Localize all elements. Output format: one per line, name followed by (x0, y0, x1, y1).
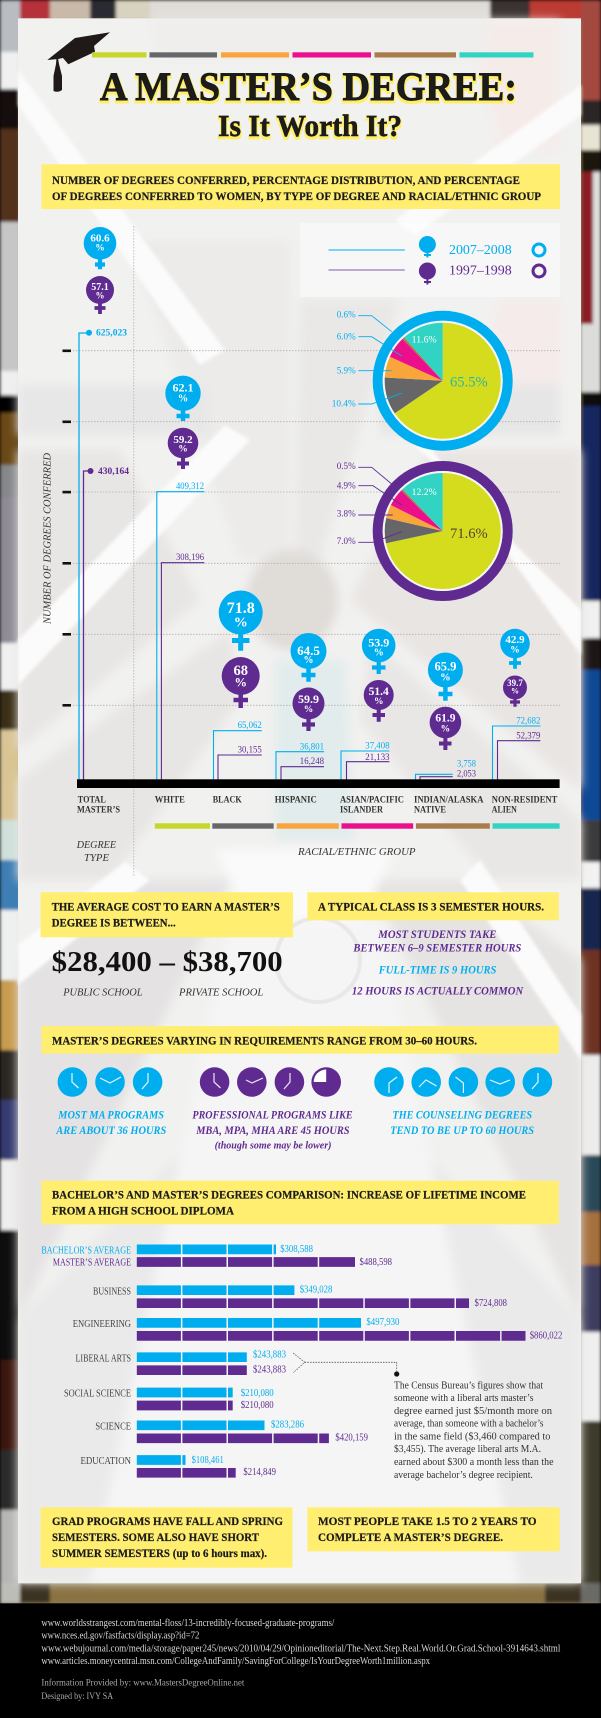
panel: typical class: BETWEEN 6–9 SEMESTER HOURS (352, 942, 521, 954)
icon: female 62.1: % (178, 394, 188, 405)
clocks: counseling degrees 60 hours: THE COUNSELING DEGREES (392, 1110, 532, 1122)
icon: female 62.1: 62.1 (172, 381, 194, 395)
pie chart: 1997-1998: 71.6% (450, 526, 488, 542)
icon: female 71.8 (219, 590, 263, 651)
panel: average cost: DEGREE IS BETWEEN... (52, 916, 176, 930)
bar chart: lifetime income: $308,588 (280, 1244, 313, 1255)
panel: average cost (41, 892, 293, 998)
icon: female 71.8: 71.8 (227, 600, 255, 617)
legend: 1997–1998 (449, 264, 512, 279)
icon: female 59.2: % (178, 445, 188, 455)
icon: female 60.6: % (95, 244, 105, 254)
bar chart: lifetime income: $724,808 (474, 1298, 507, 1309)
panel: grad programs semesters (41, 1507, 292, 1568)
legend (328, 236, 545, 284)
footer: www.webujournal.com/media/storage/paper245/news/2010/04/29/Opinioneditorial/The-Next.Step.Real.World.Or.Grad.School-3914643.shtml (41, 1643, 561, 1654)
chart: black lines: 30,155 (238, 745, 262, 755)
subtitle: Is It Worth It? (218, 108, 402, 143)
callout: census bureau text: earned about $300 a month less than the (394, 1457, 554, 1468)
panel: average cost: $28,400 – $38,700 (52, 947, 283, 978)
category labels: MASTER’S (77, 806, 120, 816)
icon: female 64.5: 64.5 (297, 643, 320, 658)
icon: female 68: 68 (233, 663, 248, 679)
icon: female 64.5: % (304, 655, 314, 666)
icon: female 60.6 (84, 227, 116, 269)
icon: graduation cap (47, 32, 110, 92)
bar chart: lifetime income: BUSINESS (93, 1286, 131, 1297)
heading: degrees conferred (42, 164, 560, 209)
bar chart: lifetime income: $349,028 (300, 1285, 332, 1296)
bar chart: lifetime income: SOCIAL SCIENCE (64, 1389, 131, 1400)
callout: census bureau text: in the same field ($3,460 compared to (394, 1431, 550, 1442)
bar chart: lifetime income (41, 1244, 562, 1478)
category labels: ALIEN (492, 806, 517, 816)
panel: grad programs semesters: SUMMER SEMESTERS (up to 6 hours max). (52, 1546, 267, 1560)
clocks: professional programs 45 hours: MBA, MPA, MHA ARE 45 HOURS (195, 1125, 350, 1137)
icon: female 59.9: 59.9 (298, 692, 319, 706)
icon: female 59.2: 59.2 (173, 434, 193, 446)
bar chart: lifetime income: $214,849 (243, 1467, 276, 1478)
panel: typical class (307, 892, 559, 998)
chart: total master's lines (79, 328, 130, 780)
icon: female 59.9 (292, 688, 324, 731)
chart: white lines: 308,196 (176, 552, 204, 562)
bar chart: lifetime income: $283,286 (271, 1420, 304, 1431)
title: A MASTER’S DEGREE: (100, 64, 517, 109)
clocks: counseling degrees 60 hours: TEND TO BE UP TO 60 HOURS (390, 1125, 534, 1137)
pie chart: 1997-1998 (337, 462, 508, 596)
bar chart: lifetime income: $243,883 (253, 1350, 286, 1361)
pie chart: 1997-1998: 12.2% (412, 488, 437, 498)
callout: census bureau text: average bachelor’s degree recipient. (394, 1470, 533, 1481)
icon: female 51.4: % (374, 697, 383, 707)
icon: female 57.1 (86, 276, 114, 314)
clocks: MA programs 36 hours (55, 1067, 166, 1137)
icon: female 39.7 (503, 676, 527, 707)
chart: black lines (214, 720, 262, 780)
panel: grad programs semesters: GRAD PROGRAMS HAVE FALL AND SPRING (52, 1514, 283, 1528)
axis label: degree type (76, 839, 116, 864)
panel: average cost: THE AVERAGE COST TO EARN A MASTER’S (52, 900, 280, 914)
icon: female 39.7: 39.7 (507, 678, 523, 688)
callout: census bureau text: $3,455). The average liberal arts M.A. (394, 1444, 541, 1455)
callout: census bureau text: The Census Bureau’s figures show that (394, 1380, 543, 1391)
icon: female 51.4 (364, 680, 394, 722)
heading: requirements range (41, 1026, 559, 1054)
chart: black lines: 65,062 (238, 720, 262, 730)
heading: degrees conferred: OF DEGREES CONFERRED TO WOMEN, BY TYPE OF DEGREE AND RACIAL/ETHNIC GROUP (52, 189, 541, 203)
icon: female 42.9: 42.9 (505, 634, 525, 646)
bar chart: lifetime income: EDUCATION (80, 1456, 131, 1467)
chart: non-resident alien lines: 52,379 (516, 730, 541, 740)
category labels: TOTAL (78, 796, 106, 806)
axis label: degree type: TYPE (84, 852, 109, 864)
icon: female 61.9: 61.9 (435, 713, 456, 725)
heading: lifetime income: FROM A HIGH SCHOOL DIPLOMA (52, 1204, 234, 1218)
icon: female 59.9: % (304, 705, 313, 715)
pie chart: 1997-1998: 0.5% (337, 462, 356, 472)
category labels: ISLANDER (340, 806, 383, 816)
icon: female 71.8: % (234, 616, 248, 631)
icon: female 53.9: 53.9 (368, 636, 389, 650)
footer: www.nces.ed.gov/fastfacts/display.asp?id=72 (41, 1631, 199, 1642)
icon: female 65.9: % (440, 673, 451, 684)
callout: census bureau text (394, 1380, 554, 1481)
chart: asian/pacific islander lines: 37,408 (365, 741, 390, 751)
chart: indian/alaska native lines: 3,758 (457, 759, 476, 769)
icon: female 65.9 (428, 652, 463, 701)
panel: typical class: MOST STUDENTS TAKE (377, 929, 497, 941)
icon: female 64.5 (290, 633, 326, 682)
bar chart: lifetime income: ENGINEERING (73, 1319, 131, 1330)
footer: Information Provided by: www.MastersDegreeOnline.net (41, 1677, 245, 1688)
callout: census bureau text: average, than someone with a bachelor’s (394, 1419, 544, 1430)
clocks: MA programs 36 hours: MOST MA PROGRAMS (57, 1110, 164, 1122)
icon: female 65.9: 65.9 (434, 660, 456, 674)
panel: time to complete: COMPLETE A MASTER’S DEGREE. (318, 1530, 503, 1544)
category labels: BLACK (213, 796, 242, 806)
icon: female 62.1 (165, 376, 201, 421)
pie chart: 2007-2008 (332, 310, 508, 446)
panel: grad programs semesters: SEMESTERS. SOME ALSO HAVE SHORT (52, 1530, 259, 1544)
icon: female 39.7: % (511, 686, 519, 696)
chart: hispanic lines (276, 741, 324, 780)
callout: census bureau text: degree earned just $5/month more on (394, 1406, 552, 1417)
chart: white lines: 409,312 (176, 481, 204, 491)
panel: time to complete: MOST PEOPLE TAKE 1.5 TO 2 YEARS TO (318, 1514, 537, 1528)
bar chart: lifetime income: $497,930 (366, 1317, 399, 1328)
chart: non-resident alien lines: 72,682 (516, 716, 540, 726)
bar chart: lifetime income: $108,461 (192, 1455, 224, 1466)
bar chart: lifetime income: MASTER’S AVERAGE (53, 1258, 131, 1269)
clocks: professional programs 45 hours: PROFESSIONAL PROGRAMS LIKE (192, 1110, 353, 1122)
icon: female 61.9 (430, 707, 461, 750)
x axis bar (77, 779, 560, 788)
footer: www.articles.moneycentral.msn.com/CollegeAndFamily/SavingForCollege/IsYourDegreeWorth1million.aspx (41, 1656, 430, 1667)
clocks: MA programs 36 hours: ARE ABOUT 36 HOURS (55, 1125, 166, 1137)
callout: liberal arts connector (293, 1353, 399, 1377)
icon: female 61.9: % (441, 725, 450, 735)
panel: typical class: A TYPICAL CLASS IS 3 SEMESTER HOURS. (318, 900, 544, 914)
colour key strip (155, 823, 560, 829)
chart: asian/pacific islander lines (341, 741, 390, 780)
clocks: professional programs 45 hours: (though some may be lower) (215, 1140, 332, 1152)
icon: female 59.2 (168, 428, 198, 469)
panel: time to complete (307, 1507, 560, 1551)
icon: female 53.9 (362, 629, 396, 674)
footer: Designed by: IVY SA (41, 1692, 113, 1702)
chart: indian/alaska native lines: 2,053 (457, 768, 476, 778)
bar chart: lifetime income: $210,080 (241, 1388, 274, 1399)
heading: lifetime income: BACHELOR’S AND MASTER’S DEGREES COMPARISON: INCREASE OF LIFETIME INCOME (52, 1188, 526, 1202)
chart: hispanic lines: 16,248 (300, 756, 324, 766)
pie chart: 2007-2008: 65.5% (450, 375, 488, 391)
chart: total master's lines: 430,164 (98, 466, 130, 476)
panel: typical class: FULL-TIME IS 9 HOURS (378, 964, 496, 976)
icon: female 60.6: 60.6 (90, 233, 110, 245)
legend: 2007–2008 (449, 243, 512, 258)
panel: average cost: PUBLIC SCHOOL (62, 986, 143, 998)
pie chart: 1997-1998: 4.9% (337, 481, 356, 491)
heading: lifetime income (41, 1181, 559, 1224)
bar chart: lifetime income: $860,022 (530, 1331, 562, 1342)
clocks: professional programs 45 hours (192, 1067, 353, 1152)
bar chart: lifetime income: SCIENCE (95, 1422, 131, 1433)
icon: female 42.9 (500, 629, 530, 669)
category labels (77, 796, 558, 816)
bar chart: lifetime income: $243,883 (253, 1364, 286, 1375)
pie chart: 2007-2008: 10.4% (332, 400, 356, 410)
category labels: WHITE (155, 796, 185, 806)
category labels: ASIAN/PACIFIC (340, 796, 404, 806)
chart: asian/pacific islander lines: 21,133 (365, 752, 390, 762)
footer (0, 1603, 601, 1718)
footer: www.worldsstrangest.com/mental-floss/13-incredibly-focused-graduate-programs/ (41, 1618, 335, 1629)
callout: census bureau text: someone with a liberal arts master’s (394, 1393, 534, 1404)
icon: female 57.1: % (96, 290, 104, 300)
bar chart: lifetime income: $420,159 (335, 1433, 368, 1444)
bar chart: lifetime income: $488,598 (360, 1257, 392, 1268)
bar chart: lifetime income: BACHELOR’S AVERAGE (41, 1245, 131, 1256)
pie chart: 1997-1998: 7.0% (337, 537, 356, 547)
category labels: HISPANIC (275, 796, 317, 806)
bar chart: lifetime income: $210,080 (241, 1400, 274, 1411)
category labels: NATIVE (414, 806, 446, 816)
chart: indian/alaska native lines (416, 759, 476, 780)
icon: female 53.9: % (374, 648, 384, 659)
axis label: racial/ethnic group: RACIAL/ETHNIC GROUP (297, 846, 416, 858)
axis label: degree type: DEGREE (76, 839, 116, 851)
chart: white lines (157, 481, 204, 780)
category labels: INDIAN/ALASKA (414, 796, 484, 806)
icon: female 68: % (234, 676, 247, 690)
chart: total master's lines: 625,023 (96, 328, 128, 338)
chart: hispanic lines: 36,801 (300, 741, 324, 751)
bar chart: lifetime income: LIBERAL ARTS (76, 1354, 131, 1365)
pie chart: 2007-2008: 11.6% (412, 336, 437, 346)
icon: female 51.4: 51.4 (369, 686, 389, 698)
heading: degrees conferred: NUMBER OF DEGREES CONFERRED, PERCENTAGE DISTRIBUTION, AND PERCENTAGE (52, 173, 520, 187)
icon: female 68 (222, 657, 260, 708)
icon: female 42.9: % (510, 646, 520, 656)
icon: female 57.1: 57.1 (91, 282, 109, 293)
panel: typical class: 12 HOURS IS ACTUALLY COMMON (352, 986, 524, 998)
heading: requirements range: MASTER’S DEGREES VARYING IN REQUIREMENTS RANGE FROM 30–60 HOURS. (52, 1033, 477, 1047)
colour strip: top (92, 52, 534, 58)
pie chart: 1997-1998: 3.8% (337, 510, 356, 520)
axis label: number of degrees conferred: NUMBER OF DEGREES CONFERRED (42, 453, 54, 625)
clocks: counseling degrees 60 hours (374, 1067, 552, 1137)
pie chart: 2007-2008: 5.9% (337, 366, 356, 376)
chart: non-resident alien lines (492, 716, 541, 780)
pie chart: 2007-2008: 0.6% (337, 310, 356, 320)
category labels: NON-RESIDENT (492, 796, 558, 806)
pie chart: 2007-2008: 6.0% (337, 332, 356, 342)
panel: average cost: PRIVATE SCHOOL (178, 986, 263, 998)
